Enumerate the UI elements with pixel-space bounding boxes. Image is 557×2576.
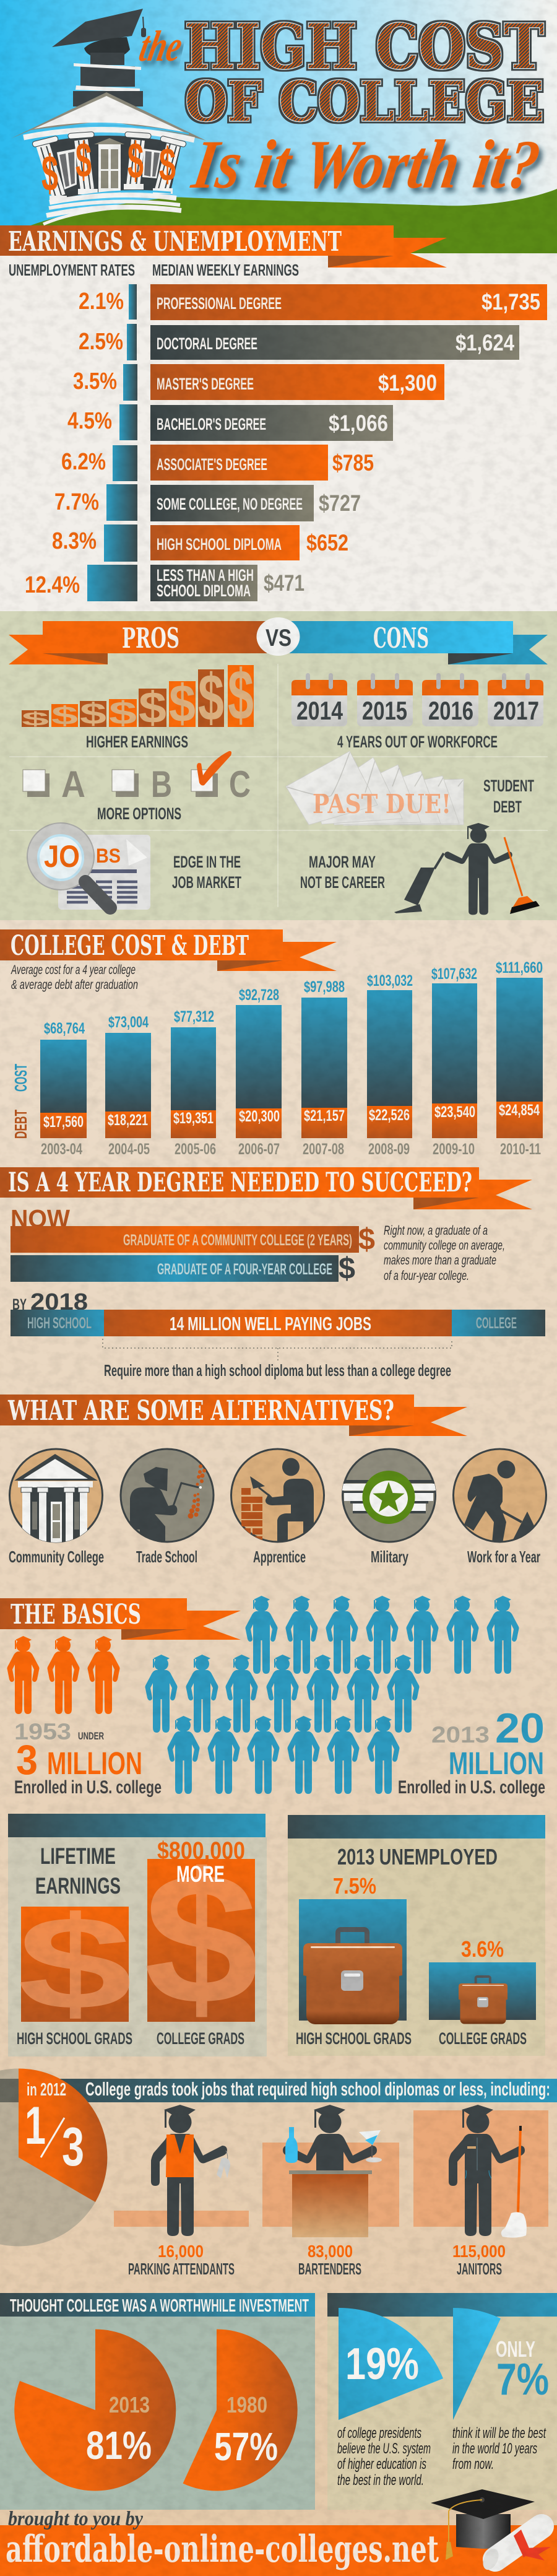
bar: 14 million jobs: COLLEGE	[476, 1315, 517, 1332]
bar: doctoral degree: DOCTORAL DEGREE	[157, 334, 257, 353]
badge: vs: VS	[266, 625, 291, 651]
icon: growing dollar bars: $	[228, 656, 254, 735]
label: major may not be career	[300, 853, 385, 892]
bar: associate's degree: $785	[332, 450, 374, 476]
bar: associate's degree: ASSOCIATE'S DEGREE	[157, 455, 267, 474]
icon: jobs newspaper with magnifier: JO	[44, 839, 80, 874]
label: community college: Community College	[9, 1547, 104, 1566]
note: right now: Right now, a graduate of a	[384, 1224, 488, 1238]
section: one third of college grads	[0, 2068, 557, 2278]
icon: small briefcase	[459, 1977, 507, 2024]
bar: doctoral degree: $1,624	[456, 330, 514, 355]
credit: brought to you by: brought to you by	[8, 2508, 143, 2530]
badge: vs	[256, 617, 300, 656]
stat: 1953 enrolment: MILLION	[47, 1746, 142, 1781]
pie wedge: 1/3	[19, 2068, 107, 2202]
pie: 2013 81%	[14, 2330, 176, 2491]
pie: 1980 57%	[183, 2329, 298, 2491]
icon: growing dollar bars: $	[109, 695, 137, 731]
icon: work for a year	[453, 1449, 546, 1543]
bar 2003-04	[40, 1020, 87, 1158]
ribbon: cons: CONS	[373, 622, 429, 655]
section background: earnings	[0, 253, 557, 611]
icon: growing dollar bars	[22, 656, 254, 735]
bar 2005-06: $77,312	[174, 1008, 214, 1025]
icon: multiple choice boxes: B	[151, 764, 172, 805]
pie: 2013 81%: 2013	[109, 2392, 150, 2417]
stamp: past due: PAST DUE!	[313, 789, 451, 819]
stat: parking attendants	[128, 2242, 235, 2278]
icon: growing dollar bars: $	[80, 698, 106, 731]
label: by 2018	[12, 1289, 88, 1315]
calendar 2015: 2015	[362, 696, 407, 725]
bar 2009-10: 2009-10	[433, 1141, 475, 1158]
bar: community college graduate: GRADUATE OF A COMMUNITY COLLEGE (2 YEARS)	[123, 1232, 352, 1249]
bar 2003-04: $68,764	[44, 1020, 85, 1037]
ribbon: pros	[9, 621, 267, 664]
bar: high school grads	[17, 1889, 132, 2037]
chart: unemployment rates	[25, 284, 137, 601]
hero section	[0, 0, 557, 260]
chart: unemployment rates: 2.1%	[79, 289, 124, 315]
heading ribbon: college cost and debt: COLLEGE COST & DEBT	[11, 930, 249, 962]
note: right now: of a four-year college.	[384, 1269, 469, 1283]
bar 2007-08: $97,988	[304, 978, 345, 996]
calendar 2016: 2016	[428, 696, 473, 725]
chart: unemployment rates: 6.2%	[61, 449, 106, 475]
text: college presidents: of higher education is	[337, 2456, 426, 2473]
stat: 1953 enrolment: Enrolled in U.S. college	[14, 1777, 162, 1798]
stat: 1953 enrolment: 1953	[14, 1719, 71, 1744]
bar: less than high school: LESS THAN A HIGH	[157, 566, 254, 585]
bar: associate's degree	[150, 445, 374, 481]
bar: college grads: $	[144, 1834, 259, 2043]
text: think it will be best	[452, 2425, 546, 2473]
pie: one third	[0, 2068, 108, 2247]
bar: bachelor's degree	[150, 405, 393, 441]
bar: four-year college graduate	[11, 1252, 355, 1286]
icon: graduate with vacuum and broom	[394, 823, 540, 915]
panel: pros vs cons	[0, 611, 557, 920]
stat: 2013 enrolment: 2013	[431, 1722, 490, 1747]
heading ribbon: earnings and unemployment: EARNINGS & UNEMPLOYMENT	[8, 226, 342, 258]
value: only 7%: ONLY	[496, 2336, 535, 2362]
wedge: 19%: 19%	[345, 2339, 419, 2389]
icon: multiple choice boxes: C	[229, 764, 251, 805]
bar: some college: SOME COLLEGE, NO DEGREE	[157, 495, 303, 513]
panel: worthwhile investment	[0, 2293, 315, 2510]
bar 2008-09	[367, 972, 413, 1158]
heading: thought college was worthwhile: THOUGHT COLLEGE WAS A WORTHWHILE INVESTMENT	[10, 2296, 309, 2316]
label: higher earnings: HIGHER EARNINGS	[86, 733, 188, 751]
value: 1/3	[25, 2096, 84, 2177]
bar 2010-11	[496, 959, 543, 1158]
pie: 1980 57%: 57%	[214, 2424, 278, 2469]
calendar 2014: 2014	[296, 696, 343, 725]
bar 2004-05	[105, 1014, 151, 1158]
label: now: NOW	[11, 1204, 70, 1233]
heading: 2013 unemployed: 2013 UNEMPLOYED	[337, 1844, 498, 1869]
note: chart description	[11, 963, 138, 992]
backdrop: janitor	[413, 2110, 548, 2227]
label: in 2012: in 2012	[27, 2080, 66, 2100]
bar: 14 million jobs: 14 MILLION WELL PAYING JOBS	[170, 1313, 371, 1334]
label: high school grads: HIGH SCHOOL GRADS	[296, 2029, 412, 2048]
bar 2005-06	[171, 1008, 216, 1158]
bar: 14 million jobs	[11, 1310, 545, 1336]
bar 2007-08	[301, 978, 347, 1158]
stat: janitors: JANITORS	[457, 2260, 502, 2278]
bar 2009-10	[431, 965, 477, 1158]
icon: college building with graduation cap: $	[41, 146, 58, 202]
icon: college building with graduation cap: $	[159, 139, 176, 191]
column heading: unemployment rates: UNEMPLOYMENT RATES	[9, 261, 135, 279]
backdrop: parking	[114, 2211, 249, 2227]
stat: bartenders: 83,000	[308, 2242, 353, 2261]
icon: college building with graduation cap: $	[76, 133, 92, 188]
label: by 2018: 2018	[30, 1289, 88, 1315]
icon: college building with graduation cap	[11, 9, 206, 224]
heading ribbon: alternatives: WHAT ARE SOME ALTERNATIVES?	[7, 1395, 394, 1427]
backdrop: bartending	[262, 2143, 399, 2227]
bar 2007-08: 2007-08	[303, 1141, 344, 1158]
bar: master's degree: MASTER'S DEGREE	[157, 375, 254, 393]
bar: some college	[150, 485, 361, 521]
label: major may not be career: MAJOR MAY	[309, 853, 376, 871]
note: chart description: Average cost for a 4 year college	[11, 963, 136, 977]
bar: doctoral degree	[150, 325, 519, 360]
icon: growing dollar bars: $	[22, 708, 49, 729]
stat: parking attendants: PARKING ATTENDANTS	[128, 2260, 235, 2278]
icon: graduation cap and diploma	[431, 2489, 551, 2572]
text: college presidents: the best in the world.	[337, 2472, 424, 2489]
wedge: 19%	[339, 2308, 443, 2420]
text: think it will be best: from now.	[452, 2456, 494, 2473]
text: college presidents	[337, 2425, 431, 2489]
stat: janitors: 115,000	[452, 2242, 506, 2261]
bar: high school unemployed	[299, 1899, 407, 2021]
ribbon: pros: PROS	[122, 622, 179, 655]
label: military: Military	[371, 1547, 408, 1566]
bar: professional degree: $1,735	[481, 289, 540, 315]
wedge: 7%	[453, 2308, 501, 2420]
bar 2006-07: $20,300	[239, 1108, 280, 1125]
panel: 2013 unemployed	[288, 1815, 545, 2056]
bar 2010-11: $111,660	[496, 959, 543, 977]
pie: 2013 81%: 81%	[86, 2423, 152, 2468]
icon: growing dollar bars: $	[169, 674, 196, 733]
heading ribbon: the basics: THE BASICS	[11, 1599, 141, 1630]
heading: lifetime earnings: EARNINGS	[35, 1873, 121, 1899]
text: college presidents: of college presidents	[337, 2425, 421, 2442]
bar 2005-06: $19,351	[173, 1110, 214, 1127]
bar 2007-08: $21,157	[304, 1107, 345, 1125]
icon: multiple choice boxes: A	[61, 764, 85, 805]
footer	[0, 2489, 557, 2576]
calendar 2017: 2017	[493, 696, 539, 725]
calendar 2016	[422, 673, 478, 726]
title: the: the	[136, 23, 186, 71]
column heading: median weekly earnings: MEDIAN WEEKLY EARNINGS	[152, 261, 299, 279]
bar: master's degree	[150, 364, 444, 400]
icon row: 2013 students	[145, 1596, 519, 1794]
label: major may not be career: NOT BE CAREER	[300, 873, 385, 892]
bar: four-year college graduate: $	[339, 1252, 355, 1286]
bar: less than high school: SCHOOL DIPLOMA	[157, 581, 251, 600]
bar 2006-07	[236, 986, 282, 1158]
stat: 1953 enrolment: UNDER	[78, 1730, 104, 1742]
bar: high school diploma	[150, 525, 348, 560]
bar: bachelor's degree: $1,066	[329, 411, 388, 436]
icon: calendars	[291, 673, 543, 726]
label: edge in the job market: JOB MARKET	[172, 873, 241, 892]
calendar 2017	[488, 673, 543, 726]
icon: military	[342, 1449, 436, 1542]
label: student debt	[483, 777, 534, 816]
icon: jobs newspaper with magnifier	[27, 823, 150, 910]
bar: high school diploma: $652	[306, 530, 348, 555]
bar: high school grads: $	[17, 1889, 132, 2037]
note: right now: makes more than a graduate	[384, 1253, 496, 1268]
bar 2008-09: 2008-09	[368, 1141, 410, 1158]
icon: apprentice	[231, 1449, 324, 1543]
bar 2008-09: $103,032	[367, 972, 413, 990]
label: by 2018: BY	[12, 1296, 27, 1313]
chart: unemployment rates: 3.5%	[73, 368, 117, 394]
bar 2010-11: $24,854	[499, 1102, 540, 1119]
bar: professional degree: PROFESSIONAL DEGREE	[157, 294, 282, 313]
label: student debt: DEBT	[493, 798, 522, 816]
icon: college building with graduation cap: $	[127, 132, 144, 189]
bar: four-year college graduate: GRADUATE OF A FOUR-YEAR COLLEGE	[157, 1261, 332, 1278]
bar 2004-05: $73,004	[108, 1014, 149, 1031]
sky	[0, 0, 557, 260]
label: high school grads: HIGH SCHOOL GRADS	[17, 2029, 132, 2048]
bar 2004-05: 2004-05	[108, 1141, 150, 1158]
figure: parking attendant	[151, 2105, 230, 2236]
chart: unemployment rates: 7.7%	[54, 489, 99, 515]
bar 2010-11: 2010-11	[500, 1141, 541, 1158]
icon row: 1953 students	[7, 1636, 120, 1714]
figure: janitor	[449, 2105, 527, 2238]
stat: 1953 enrolment	[14, 1719, 162, 1798]
chart: college cost and debt	[40, 959, 543, 1158]
bar 2006-07: $92,728	[239, 986, 279, 1004]
bar 2003-04: 2003-04	[41, 1141, 82, 1158]
icon: community college	[10, 1449, 103, 1543]
stat: parking attendants: 16,000	[158, 2242, 204, 2261]
icon: trade school	[121, 1449, 214, 1543]
value: 3.6%: 3.6%	[461, 1936, 504, 1962]
axis label: cost: COST	[11, 1064, 30, 1092]
bar 2008-09: $22,526	[369, 1107, 410, 1124]
panel: lifetime earnings	[8, 1814, 267, 2056]
icon: large briefcase	[303, 1930, 402, 2024]
heading: lifetime earnings	[35, 1843, 121, 1899]
bar: professional degree	[150, 284, 547, 320]
heading: lifetime earnings: LIFETIME	[40, 1843, 116, 1869]
bar: some college: $727	[319, 490, 361, 516]
value: 1/3: 3	[62, 2116, 84, 2177]
label: edge in the job market: EDGE IN THE	[173, 853, 241, 871]
pie: 1980 57%: 1980	[227, 2392, 267, 2417]
bar: community college graduate	[11, 1223, 375, 1256]
bar: master's degree: $1,300	[378, 370, 437, 396]
bar 2004-05: $18,221	[108, 1112, 148, 1129]
stat: 2013 enrolment: 20	[495, 1705, 545, 1752]
calendar 2015	[357, 673, 413, 726]
label: college grads: COLLEGE GRADS	[157, 2029, 244, 2048]
value: $800,000: $800,000	[157, 1837, 245, 1865]
stat: 2013 enrolment	[398, 1705, 545, 1798]
bar 2006-07: 2006-07	[238, 1141, 280, 1158]
note: chart description: & average debt after graduation	[11, 978, 138, 992]
bar 2009-10: $107,632	[431, 965, 477, 983]
text: college presidents: believe the U.S. system	[337, 2440, 431, 2457]
chart: unemployment rates: 2.5%	[79, 329, 123, 355]
bar: community college graduate: $	[358, 1223, 375, 1256]
icon: past due envelopes	[286, 751, 464, 825]
heading ribbon: alternatives	[0, 1395, 467, 1436]
chart: median weekly earnings	[150, 284, 547, 601]
heading ribbon: college cost and debt	[0, 929, 337, 971]
green hill	[0, 189, 557, 260]
heading ribbon: the basics	[0, 1598, 241, 1640]
heading ribbon: earnings and unemployment	[0, 225, 447, 268]
icon: jobs newspaper with magnifier: BS	[96, 845, 121, 867]
bar 2005-06: 2005-06	[175, 1141, 216, 1158]
label: apprentice: Apprentice	[253, 1547, 306, 1566]
label: edge in the job market	[172, 853, 241, 892]
figure: bartender	[283, 2105, 382, 2237]
bar 2009-10: $23,540	[434, 1103, 475, 1121]
stat: bartenders: BARTENDERS	[298, 2260, 361, 2278]
bar: college unemployed	[429, 1962, 536, 2020]
icon: growing dollar bars: $	[51, 701, 78, 730]
value: 7.5%: 7.5%	[333, 1873, 376, 1899]
icon: growing dollar bars: $	[198, 660, 224, 734]
label: trade school: Trade School	[136, 1547, 197, 1566]
calendar 2014	[291, 673, 347, 726]
icon: growing dollar bars: $	[139, 684, 166, 733]
axis label: debt: DEBT	[11, 1110, 30, 1139]
bar 2003-04: $17,560	[43, 1113, 84, 1131]
chart: unemployment rates: 4.5%	[67, 408, 112, 434]
icon: multiple choice boxes	[23, 751, 251, 805]
bar: bachelor's degree: BACHELOR'S DEGREE	[157, 415, 266, 433]
stat: janitors	[452, 2242, 506, 2278]
bar: college grads: MORE	[176, 1861, 225, 1887]
chart: unemployment rates: 12.4%	[25, 572, 80, 598]
stat: bartenders	[298, 2242, 361, 2278]
ribbon: cons	[290, 621, 548, 664]
stat: 1953 enrolment: 3	[16, 1736, 38, 1783]
bar: less than high school	[150, 565, 304, 601]
bar: less than high school: $471	[264, 570, 304, 596]
note: right now	[384, 1224, 505, 1283]
bar: high school diploma: HIGH SCHOOL DIPLOMA	[157, 535, 282, 554]
value: 1/3: 1	[25, 2096, 46, 2156]
value: only 7%	[496, 2336, 549, 2404]
label: more options: MORE OPTIONS	[97, 804, 181, 823]
chart: unemployment rates: 8.3%	[52, 528, 97, 554]
bar: 14 million jobs: HIGH SCHOOL	[27, 1315, 92, 1332]
panel: college presidents	[327, 2293, 557, 2510]
